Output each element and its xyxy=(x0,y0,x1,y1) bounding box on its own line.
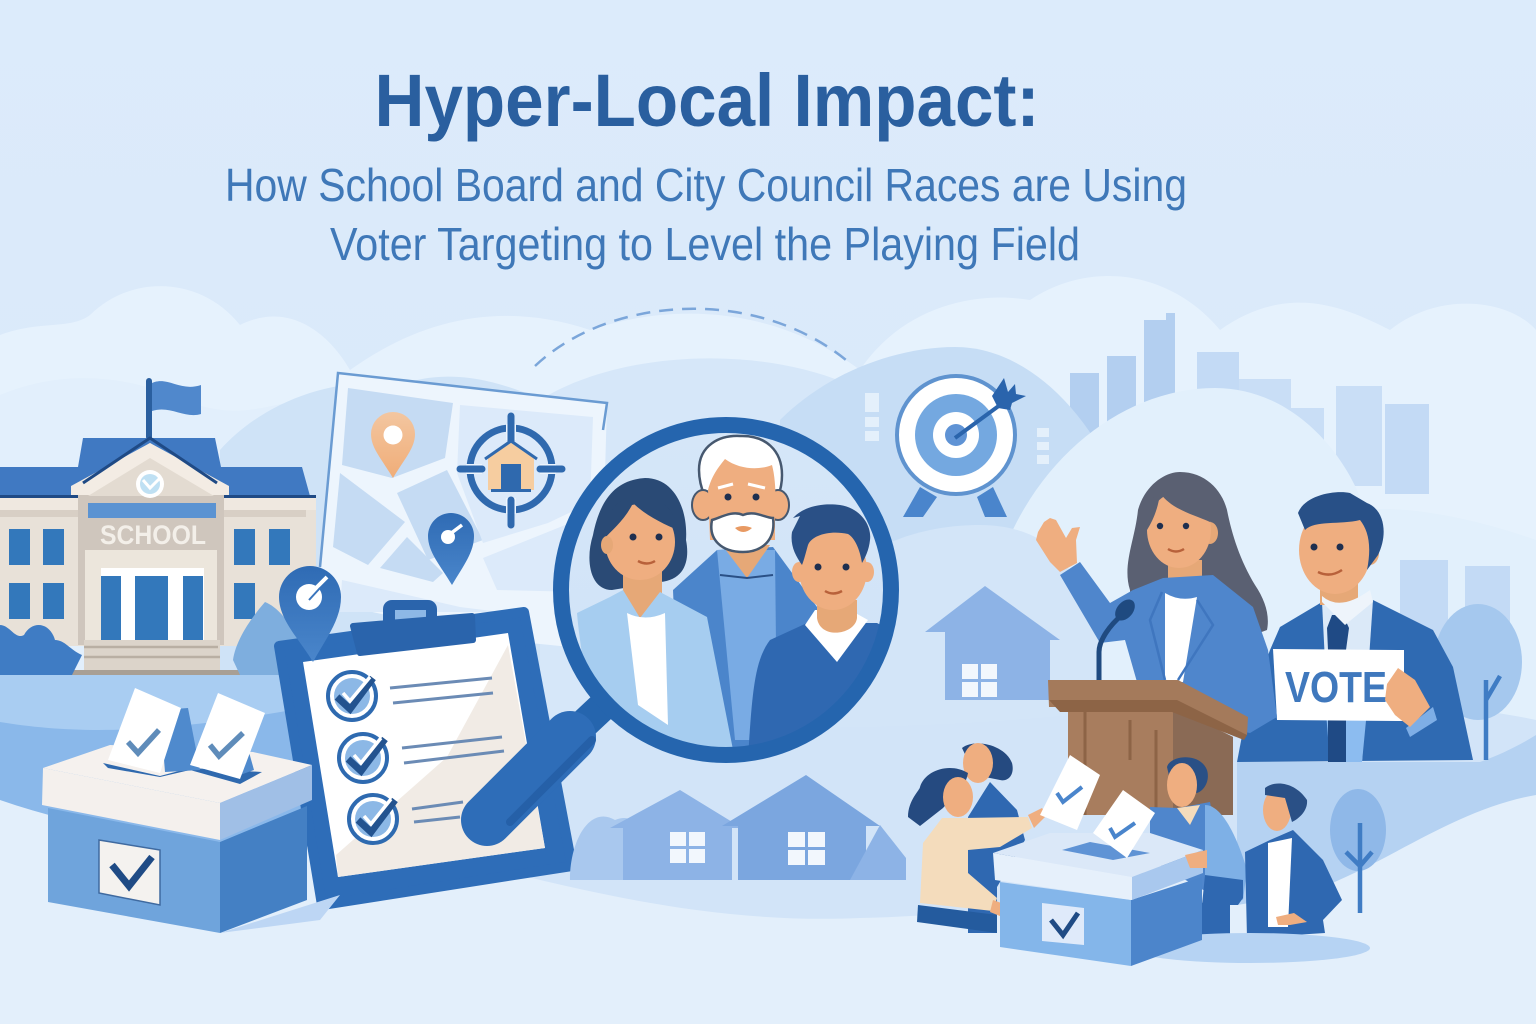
man in blue xyxy=(1150,757,1247,940)
map target house icon xyxy=(460,416,562,525)
older man xyxy=(673,434,817,747)
subtitle xyxy=(225,159,1187,270)
back woman xyxy=(962,743,1025,933)
box check label xyxy=(1042,903,1084,945)
left ballot box xyxy=(42,688,340,933)
speaker arm and jacket xyxy=(1060,562,1277,733)
target icon xyxy=(865,376,1049,517)
house right xyxy=(925,586,1060,700)
background hills xyxy=(0,276,1536,800)
people in lens xyxy=(577,434,880,747)
magnifying glass xyxy=(487,425,910,822)
map pin blue xyxy=(428,513,474,585)
paper xyxy=(303,633,545,877)
crowd xyxy=(908,743,1370,966)
hill behind target xyxy=(780,347,1095,760)
podium xyxy=(1048,680,1248,815)
map xyxy=(318,373,607,650)
ground bands xyxy=(0,675,1536,1024)
ballots xyxy=(103,688,265,784)
roof xyxy=(0,438,310,496)
microphone xyxy=(1099,596,1139,680)
checklist xyxy=(328,672,504,843)
woman in cream xyxy=(908,768,1047,933)
boy xyxy=(749,504,880,746)
check label xyxy=(99,840,160,905)
man in navy jacket xyxy=(1245,784,1342,938)
man with vote sign xyxy=(1237,492,1473,762)
lens ring xyxy=(561,425,891,755)
title: Hyper-Local Impact: xyxy=(374,59,1040,142)
subtitle: Voter Targeting to Level the Playing Field xyxy=(330,218,1080,270)
clipboard xyxy=(279,600,572,905)
woman xyxy=(577,478,735,760)
school label: SCHOOL xyxy=(100,520,206,550)
school xyxy=(0,378,316,675)
steps xyxy=(66,640,243,675)
door xyxy=(85,550,217,642)
clip xyxy=(353,600,473,653)
flag xyxy=(146,378,201,440)
lid xyxy=(43,745,312,803)
candidate woman xyxy=(1036,472,1277,733)
houses middle xyxy=(570,775,906,880)
handle xyxy=(487,690,620,822)
small tree bottom right xyxy=(1330,789,1386,913)
shadow xyxy=(220,895,340,933)
windows xyxy=(9,529,290,619)
skyline xyxy=(1070,313,1429,494)
tree right xyxy=(1434,604,1522,760)
box hand xyxy=(1185,850,1207,868)
hand xyxy=(1036,518,1080,572)
box front xyxy=(48,808,220,933)
bushes xyxy=(0,625,82,675)
foreground dome xyxy=(1000,388,1536,800)
vote sign xyxy=(1273,649,1404,721)
dashed arc xyxy=(535,309,852,366)
distant city right xyxy=(820,525,1510,760)
paper ballots xyxy=(1040,755,1155,858)
right ballot box xyxy=(993,833,1203,966)
box shadow xyxy=(1130,933,1370,963)
location pin xyxy=(279,566,341,662)
map pin orange xyxy=(371,412,415,478)
subtitle: How School Board and City Council Races are Using xyxy=(225,159,1187,211)
vote sign: VOTE xyxy=(1285,663,1387,712)
pediment xyxy=(71,443,229,494)
